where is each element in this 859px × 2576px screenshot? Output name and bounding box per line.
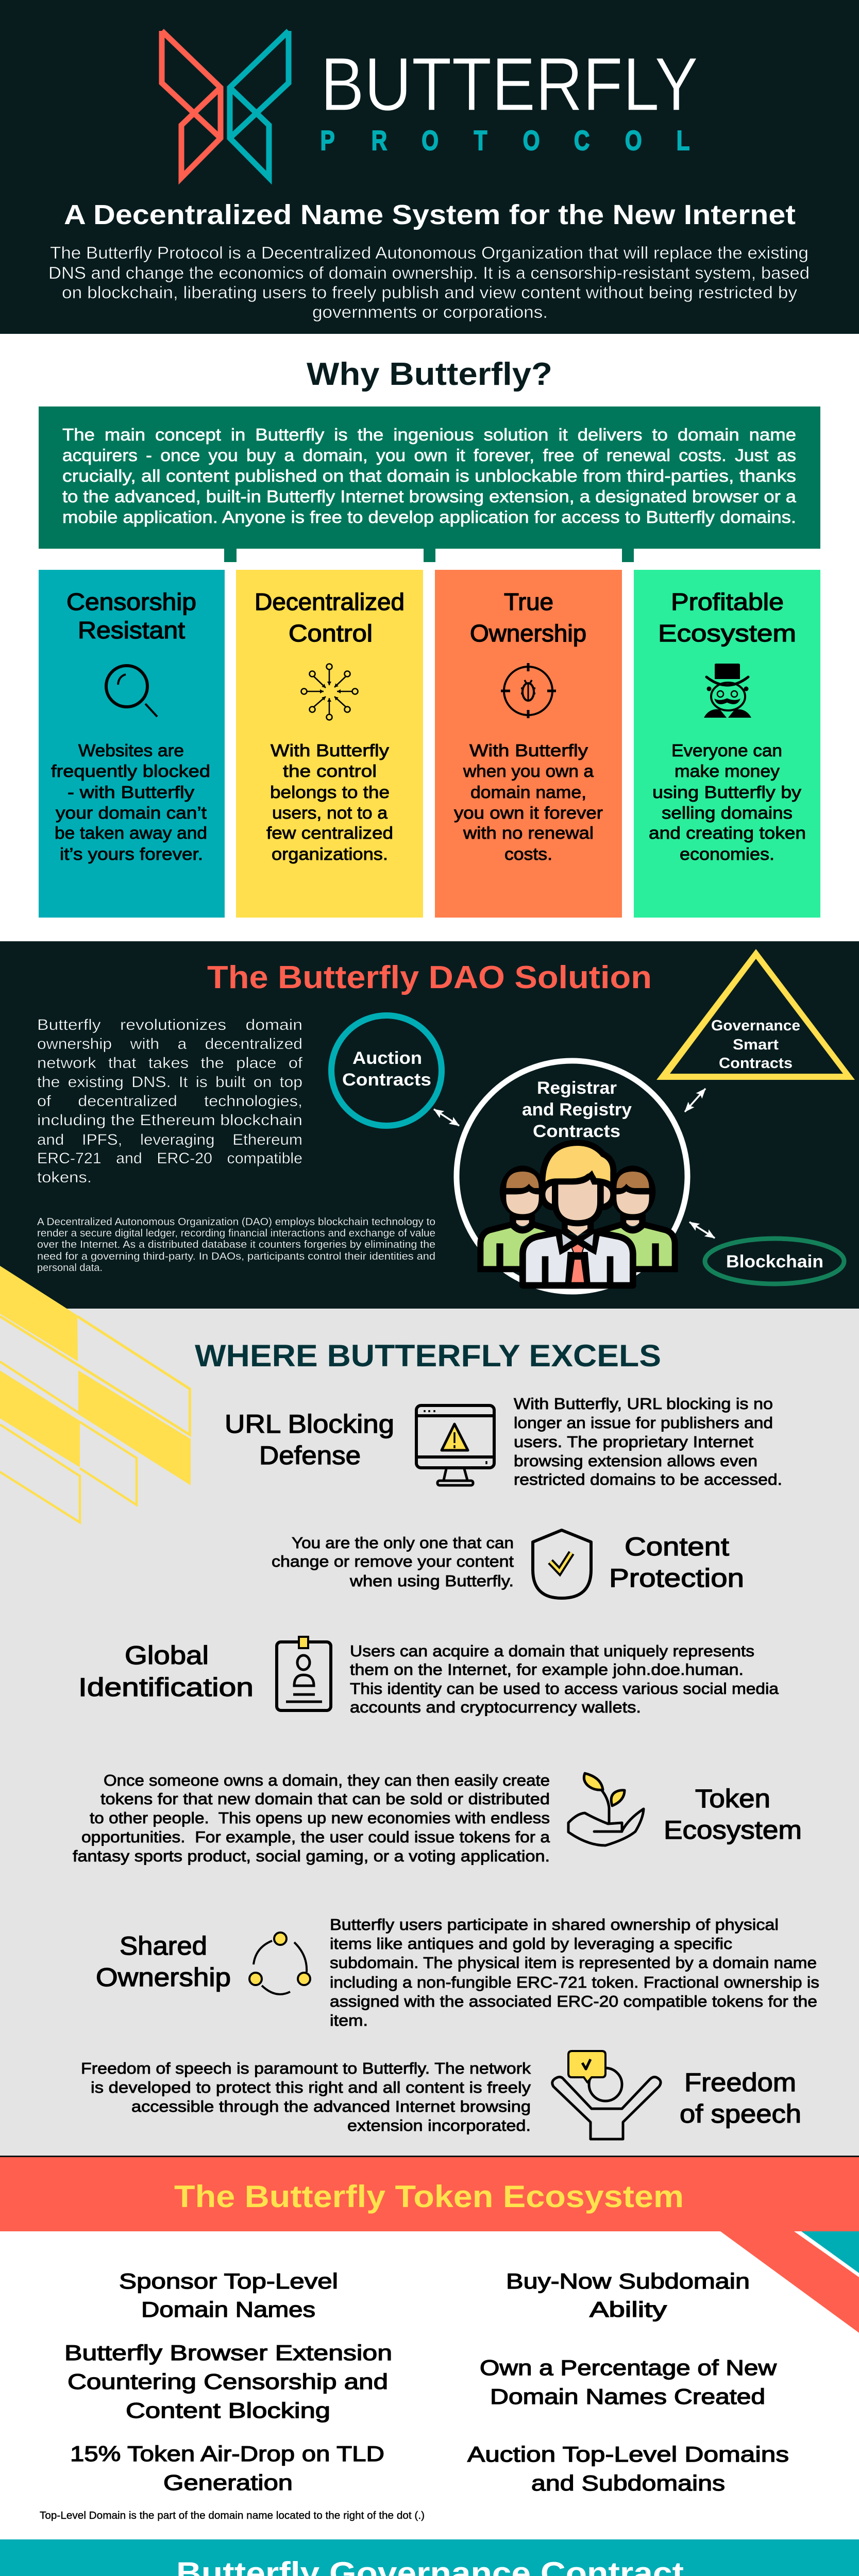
main title: A Decentralized Name System for the New Internet — [64, 199, 796, 230]
row text: accounts and cryptocurrency wallets. — [350, 1698, 641, 1716]
concept text: crucially, all content published on that domain is unblockable from third-parties, thanks — [62, 466, 796, 485]
card title: Ownership — [470, 620, 586, 647]
card title: Censorship — [66, 588, 196, 615]
panel: true ownership — [435, 570, 622, 918]
wordmark: PROTOCOL: PROTOCOL — [321, 125, 689, 156]
intro paragraph — [48, 243, 810, 321]
token ecosystem list: left column: Sponsor Top-Level — [119, 2269, 338, 2293]
token ecosystem list: left column: Generation — [163, 2470, 293, 2495]
DAO paragraph: ownership with a decentralized — [37, 1036, 302, 1053]
card text — [454, 741, 603, 863]
intro paragraph: DNS and change the economics of domain ownership. It is a censorship-resistant system, based — [48, 263, 810, 282]
decorative yellow stripes — [0, 1266, 191, 1522]
panel: profitable ecosystem — [634, 570, 820, 918]
icon: cycle of three dots — [249, 1933, 310, 1994]
card text: with no renewal — [463, 823, 594, 842]
row heading: Token — [695, 1784, 770, 1813]
row heading — [225, 1410, 394, 1470]
concept text — [62, 425, 797, 527]
row text: Once someone owns a domain, they can then easily create — [104, 1771, 550, 1789]
blockchain ellipse: Blockchain — [726, 1252, 823, 1272]
row text: longer an issue for publishers and — [514, 1414, 773, 1432]
row text: change or remove your content — [272, 1552, 514, 1570]
DAO paragraph: network that takes the place of — [37, 1055, 303, 1072]
DAO footnote: need for a governing third-party. In DAOs, participants control their identities and — [37, 1251, 435, 1262]
icon: top hat man — [704, 664, 751, 718]
icon: plant in hand — [568, 1773, 644, 1845]
row heading — [78, 1641, 254, 1702]
row: global identification — [78, 1637, 779, 1716]
row text: them on the Internet, for example john.doe.human. — [350, 1660, 744, 1679]
row text: items like antiques and gold by leveraging a specific — [330, 1935, 732, 1953]
token ecosystem list: left column: 15% Token Air-Drop on TLD — [70, 2442, 384, 2466]
row text: item. — [330, 2011, 368, 2029]
row text — [330, 1916, 819, 2029]
DAO paragraph: of decentralized technologies, — [37, 1093, 302, 1110]
row text — [73, 1771, 550, 1865]
row heading: Freedom — [684, 2068, 796, 2097]
registrar and registry contracts circle: Contracts — [533, 1122, 620, 1141]
icon: magnifier — [106, 666, 157, 717]
token ecosystem list: right column: and Subdomains — [531, 2471, 725, 2495]
token ecosystem list: right column: Domain Names Created — [490, 2384, 765, 2409]
token ecosystem list: left column: Butterfly Browser Extension — [64, 2341, 392, 2365]
icon: person with speech bubble — [552, 2051, 661, 2139]
card title: Ecosystem — [658, 620, 796, 647]
card text: using Butterfly by — [652, 783, 802, 802]
token ecosystem list: right column: Buy-Now Subdomain — [506, 2269, 750, 2293]
intro paragraph: on blockchain, liberating users to freely publish and view content without being restricted by — [62, 283, 798, 302]
row heading: of speech — [680, 2099, 801, 2128]
DAO paragraph: Butterfly revolutionizes domain — [37, 1016, 302, 1033]
card text: selling domains — [662, 803, 793, 822]
card text: frequently blocked — [51, 761, 210, 781]
token ecosystem list: right column: Own a Percentage of New — [480, 2355, 777, 2380]
card text: With Butterfly — [469, 741, 588, 760]
governance smart contracts triangle: Governance — [711, 1018, 800, 1034]
row text — [514, 1395, 782, 1488]
heading: Why Butterfly?: Why Butterfly? — [307, 357, 552, 392]
heading: The Butterfly Token Ecosystem: The Butterfly Token Ecosystem — [174, 2179, 684, 2214]
token ecosystem list: left column — [64, 2269, 392, 2495]
row heading: Protection — [609, 1564, 744, 1592]
intro paragraph: governments or corporations. — [312, 302, 548, 321]
row text: users. The proprietary Internet — [514, 1433, 753, 1451]
row text — [81, 2059, 531, 2134]
footnote: top-level domain: Top-Level Domain is the part of the domain name located to the right of the dot (.) — [40, 2510, 425, 2521]
card text: and creating token — [649, 823, 806, 842]
icon: butterfly logo — [162, 31, 289, 178]
icon: network — [301, 664, 358, 720]
card title: Profitable — [671, 588, 784, 615]
row: token ecosystem — [73, 1771, 802, 1865]
card text — [266, 741, 393, 863]
auction contracts circle — [331, 1015, 442, 1126]
row heading: Global — [125, 1641, 209, 1670]
card title: True — [504, 588, 553, 615]
card text: few centralized — [266, 823, 393, 842]
DAO footnote: render a secure digital ledger, recording financial interactions and exchange of value — [37, 1228, 435, 1239]
card text: make money — [675, 761, 780, 781]
card text — [51, 741, 210, 863]
DAO footnote: over the Internet. As a distributed database it counters forgeries by eliminating the — [37, 1239, 435, 1250]
concept text: to the advanced, built-in Butterfly Internet browsing extension, a designated browser or a — [62, 487, 797, 506]
row heading: Defense — [259, 1441, 361, 1470]
row: URL blocking defense — [225, 1395, 782, 1488]
row heading — [664, 1784, 802, 1844]
icon: monitor warning — [416, 1405, 494, 1485]
card text: be taken away and — [55, 823, 207, 842]
row text — [350, 1642, 779, 1716]
row text: to other people. This opens up new economies with endless — [90, 1809, 550, 1827]
DAO footnote — [37, 1216, 435, 1274]
row text: restricted domains to be accessed. — [514, 1470, 782, 1488]
row text: tokens for that new domain that can be sold or distributed — [100, 1790, 550, 1808]
double arrows — [434, 1089, 715, 1238]
icon: shield check — [533, 1530, 591, 1598]
card text: it’s yours forever. — [60, 844, 203, 863]
card text: users, not to a — [272, 803, 388, 822]
governance smart contracts triangle: Contracts — [719, 1055, 793, 1072]
row: content protection — [272, 1530, 744, 1598]
card title: Control — [289, 620, 373, 647]
icon: bug target — [501, 663, 556, 718]
card title — [658, 588, 796, 647]
panel: main concept — [39, 406, 820, 562]
row text: Butterfly users participate in shared ownership of physical — [330, 1916, 779, 1934]
card title — [66, 588, 196, 643]
row heading: Identification — [78, 1673, 254, 1702]
icon: id badge — [277, 1637, 331, 1710]
row text: extension incorporated. — [347, 2116, 531, 2134]
intro paragraph: The Butterfly Protocol is a Decentralized Autonomous Organization that will replace the existing — [50, 243, 809, 262]
row text: accessible through the advanced Internet browsing — [131, 2097, 531, 2115]
row: freedom of speech — [81, 2051, 801, 2139]
row heading — [609, 1532, 744, 1592]
card text: Websites are — [78, 741, 184, 760]
DAO paragraph: and IPFS, leveraging Ethereum — [37, 1131, 302, 1148]
concept text: mobile application. Anyone is free to develop application for access to Butterfly domains. — [62, 507, 796, 527]
token ecosystem list: left column: Domain Names — [141, 2297, 315, 2321]
DAO paragraph: the existing DNS. It is built on top — [37, 1074, 302, 1091]
card text: economies. — [680, 844, 774, 863]
card text: the control — [283, 761, 377, 781]
concept text: The main concept in Butterfly is the ingenious solution it delivers to domain name — [62, 425, 796, 444]
card title: Resistant — [78, 617, 185, 643]
row text: subdomain. The physical item is represented by a domain name — [330, 1954, 817, 1972]
token ecosystem list: right column: Auction Top-Level Domains — [467, 2442, 789, 2466]
card text: costs. — [504, 844, 552, 863]
DAO paragraph — [37, 1016, 303, 1186]
concept text: acquirers - once you buy a domain, you own it forever, free of renewal costs. Just as — [62, 446, 796, 465]
heading: The Butterfly DAO Solution: The Butterfly DAO Solution — [207, 960, 652, 995]
auction contracts circle: Auction — [352, 1048, 422, 1068]
row text: fantasy sports product, social gaming, or a voting application. — [73, 1847, 550, 1865]
row heading: Ownership — [96, 1963, 231, 1992]
row heading: URL Blocking — [225, 1410, 394, 1438]
card text: Everyone can — [671, 741, 782, 760]
blockchain ellipse — [705, 1239, 844, 1284]
row text — [272, 1534, 514, 1590]
card text: when you own a — [463, 761, 594, 781]
governance smart contracts triangle — [656, 949, 855, 1080]
card text: belongs to the — [270, 783, 390, 802]
DAO paragraph: tokens. — [37, 1169, 92, 1186]
panel: censorship resistant — [39, 570, 225, 918]
token ecosystem list: right column — [467, 2269, 789, 2495]
row text: Users can acquire a domain that uniquely represents — [350, 1642, 754, 1660]
row heading: Ecosystem — [664, 1816, 802, 1844]
row text: assigned with the associated ERC-20 compatible tokens for the — [330, 1992, 817, 2010]
registrar and registry contracts circle — [457, 1061, 687, 1292]
row text: You are the only one that can — [292, 1534, 514, 1552]
row heading — [96, 1931, 231, 1992]
row text: browsing extension allows even — [514, 1452, 757, 1470]
token ecosystem list: left column: Content Blocking — [126, 2398, 330, 2422]
card title: Decentralized — [255, 588, 405, 615]
card text: With Butterfly — [271, 741, 390, 760]
card text: - with Butterfly — [68, 783, 195, 802]
card text: your domain can’t — [56, 803, 207, 822]
decorative corner band — [720, 2231, 859, 2333]
registrar and registry contracts circle: and Registry — [522, 1100, 632, 1120]
row text: Freedom of speech is paramount to Butterfly. The network — [81, 2059, 531, 2077]
DAO paragraph: including the Ethereum blockchain — [37, 1112, 302, 1129]
icon: three people team — [480, 1146, 675, 1285]
row text: is developed to protect this right and all content is freely — [91, 2078, 531, 2096]
card text: organizations. — [272, 844, 388, 863]
auction contracts circle: Contracts — [342, 1070, 431, 1090]
row text: This identity can be used to access various social media — [350, 1680, 779, 1698]
governance smart contracts triangle: Smart — [733, 1037, 779, 1053]
row heading: Shared — [120, 1931, 207, 1960]
token ecosystem list: left column: Countering Censorship and — [68, 2369, 388, 2394]
row text: With Butterfly, URL blocking is no — [514, 1395, 773, 1413]
card title — [470, 588, 586, 647]
DAO footnote: personal data. — [37, 1262, 103, 1274]
card text — [649, 741, 806, 863]
row: shared ownership — [96, 1916, 819, 2029]
DAO paragraph: ERC-721 and ERC-20 compatible — [37, 1150, 302, 1167]
header: logo and wordmark — [162, 31, 698, 178]
row text: including a non-fungible ERC-721 token. Fractional ownership is — [330, 1973, 819, 1991]
card text: you own it forever — [454, 803, 603, 822]
heading: WHERE BUTTERFLY EXCELS: WHERE BUTTERFLY EXCELS — [195, 1338, 661, 1373]
panel: decentralized control — [236, 570, 423, 918]
card title — [255, 588, 405, 647]
row heading — [680, 2068, 801, 2128]
wordmark: BUTTERFLY: BUTTERFLY — [321, 42, 698, 127]
DAO footnote: A Decentralized Autonomous Organization (DAO) employs blockchain technology to — [37, 1216, 435, 1228]
card text: domain name, — [470, 783, 586, 802]
row heading: Content — [625, 1532, 729, 1561]
token ecosystem list: right column: Ability — [589, 2297, 667, 2321]
registrar and registry contracts circle: Registrar — [537, 1078, 617, 1098]
row text: opportunities. For example, the user could issue tokens for a — [81, 1828, 550, 1846]
row text: when using Butterfly. — [349, 1572, 514, 1590]
